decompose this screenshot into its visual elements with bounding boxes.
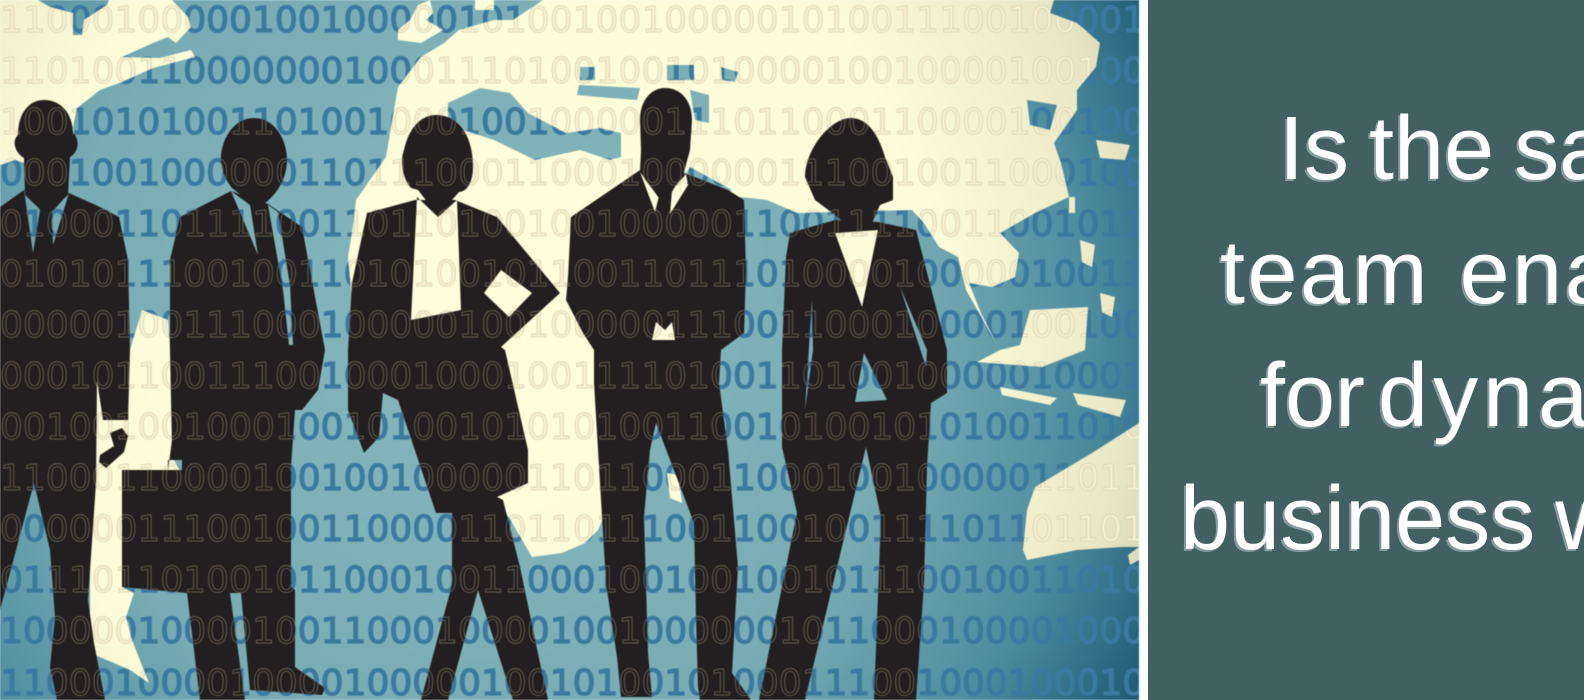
five business people silhouettes with digits: 11000100000100100000101001001000001010011100100001 xyxy=(0,0,1139,41)
binary digits over ocean: 10010101001101001000100100000111011000110000100100 xyxy=(0,102,1139,143)
binary digits over ocean: 00100100100010010100101010100110010100101010011010 xyxy=(0,407,1139,448)
five business people silhouettes with digits: 00000011100100110000110110111001100100111101101101 xyxy=(0,509,1139,550)
binary digits over ocean: 10000010000100110001000010010000001011000100001000 xyxy=(0,611,1139,652)
five business people silhouettes with digits: 00010010000001101110001100010000001110010011000100 xyxy=(0,153,1139,194)
world map landmasses with embossed digits: 00010110011100100010001001111010011010010000010001 xyxy=(0,356,1139,397)
world map landmasses with embossed digits: 11000100000100100000101001001000001010011100100001 xyxy=(0,0,1139,41)
five business people silhouettes with digits: 11000110000100100100000110110001100010010000011011 xyxy=(0,458,1139,499)
five business people silhouettes with digits xyxy=(0,87,948,700)
binary digits over ocean: 00010010000001101110001100010000001110010011000100 xyxy=(0,153,1139,194)
world map landmasses with embossed digits: 00000011100100110000110110111001100100111101101101 xyxy=(0,509,1139,550)
five business people silhouettes with digits: 00100100100010010100101010100110010100101010011010 xyxy=(0,407,1139,448)
binary digits over ocean xyxy=(0,0,1145,700)
world map landmasses with embossed digits: 00000100111000100000100100000111001100010000100100 xyxy=(0,305,1139,346)
five business people silhouettes with digits: 01000110111100110110100100100000110011110011001011 xyxy=(0,204,1139,245)
ocean background xyxy=(0,0,1139,700)
binary digits over ocean: 00000011100100110000110110111001100100111101101101 xyxy=(0,509,1139,550)
world map landmasses with embossed digits: 01000110111100110110100100100000110011110011001011 xyxy=(0,204,1139,245)
binary digits over ocean: 11010011000000010001110100100101000010010000100100 xyxy=(0,51,1139,92)
five business people silhouettes with digits: 00010110011100100010001001111010011010010000010001 xyxy=(0,356,1139,397)
world map landmasses with embossed digits: 10000010000100110001000010010000001011000100001000 xyxy=(0,611,1139,652)
five business people silhouettes with digits: 01010111001001101010010110011011101000010000010011 xyxy=(0,254,1139,295)
world map landmasses with embossed digits: 00010010000001101110001100010000001110010011000100 xyxy=(0,153,1139,194)
world map landmasses with embossed digits: 11000110000100100100000110110001100010010000011011 xyxy=(0,458,1139,499)
panel: headline on dark teal xyxy=(1148,0,1584,700)
five business people silhouettes with digits: 00000100111000100000100100000111001100010000100100 xyxy=(0,305,1139,346)
binary digits over ocean: 11000100000100100000101001001000001010011100100001 xyxy=(0,0,1139,41)
five business people silhouettes with digits: 10000010000100110001000010010000001011000100001000 xyxy=(0,611,1139,652)
five business people silhouettes with digits: 11010011000000010001110100100101000010010000100100 xyxy=(0,51,1139,92)
world map landmasses with embossed digits: 10010101001101001000100100000111011000110000100100 xyxy=(0,102,1139,143)
world map landmasses with embossed digits: 01110110100101100010011000100100100101110010011010 xyxy=(0,560,1139,601)
world map landmasses with embossed digits xyxy=(0,0,1145,700)
photo: business team silhouettes over binary world map xyxy=(0,0,1140,700)
binary digits over ocean: 00010110011100100010001001111010011010010000010001 xyxy=(0,356,1139,397)
binary digits over ocean: 00000100111000100000100100000111001100010000100100 xyxy=(0,305,1139,346)
five business people silhouettes with digits: 01110110100101100010011000100100100101110010011010 xyxy=(0,560,1139,601)
world map landmasses with embossed digits: 11010011000000010001110100100101000010010000100100 xyxy=(0,51,1139,92)
binary digits over ocean: 01010111001001101010010110011011101000010000010011 xyxy=(0,254,1139,295)
five business people silhouettes with digits: 10010101001101001000100100000111011000110000100100 xyxy=(0,102,1139,143)
world map landmasses with embossed digits: 01010111001001101010010110011011101000010000010011 xyxy=(0,254,1139,295)
world map landmasses with embossed digits: 00100100100010010100101010100110010100101010011010 xyxy=(0,407,1139,448)
binary digits over ocean: 01110110100101100010011000100100100101110010011010 xyxy=(0,560,1139,601)
binary digits over ocean: 01000110111100110110100100100000110011110011001011 xyxy=(0,204,1139,245)
binary digits over ocean: 11000110000100100100000110110001100010010000011011 xyxy=(0,458,1139,499)
